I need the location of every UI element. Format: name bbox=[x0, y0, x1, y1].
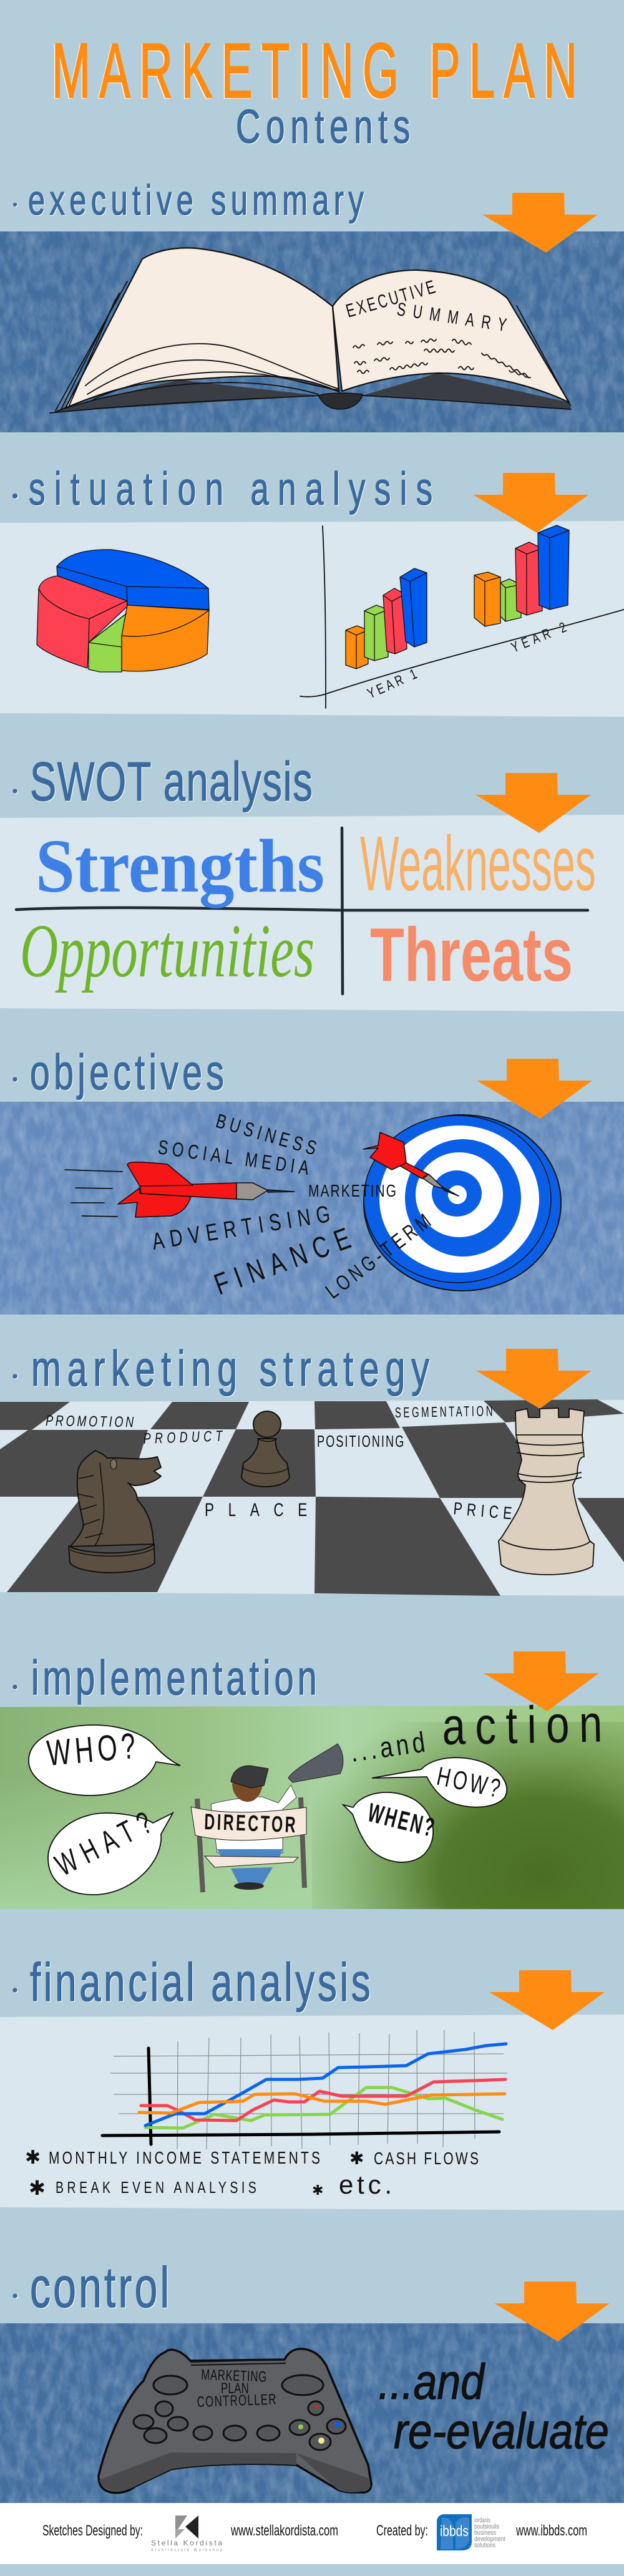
square label: place: PLACE bbox=[205, 1499, 307, 1520]
arrow bbox=[494, 2282, 610, 2341]
square label: segmentation: SEGMENTATION bbox=[395, 1403, 493, 1421]
list: financial items bbox=[25, 2147, 479, 2200]
objective word: social media: SOCIAL MEDIA bbox=[157, 1135, 311, 1179]
controller label: PLAN bbox=[221, 2380, 249, 2397]
speech bubble: who bbox=[29, 1725, 180, 1796]
illustration: director with megaphone bbox=[191, 1744, 343, 1892]
bar chart bbox=[300, 525, 624, 708]
list: financial items: etc. bbox=[339, 2170, 392, 2199]
book text: executive: EXECUTIVE bbox=[344, 277, 437, 322]
heading: executive summary: executive summary bbox=[28, 176, 364, 224]
footer background bbox=[0, 2503, 624, 2564]
illustration: flying dart bbox=[65, 1162, 295, 1217]
logo: ibbds: boutsioulis bbox=[474, 2523, 499, 2530]
book text: summary: SUMMARY bbox=[396, 299, 508, 336]
line chart bbox=[102, 2030, 507, 2149]
square label: positioning: POSITIONING bbox=[317, 1432, 404, 1451]
megaphone bbox=[288, 1744, 343, 1782]
list: financial items: ✱ bbox=[312, 2183, 323, 2199]
speech bubble: when: WHEN? bbox=[365, 1798, 437, 1842]
list: financial items: MONTHLY INCOME STATEMENTS bbox=[49, 2149, 320, 2168]
title bbox=[52, 27, 577, 153]
logo: stella kordista: Architecture Workshop bbox=[151, 2549, 223, 2552]
year 2 bars bbox=[474, 525, 569, 626]
heading: implementation: implementation bbox=[31, 1651, 317, 1705]
panel: executive summary band bbox=[0, 231, 624, 432]
list: financial items: ✱ bbox=[29, 2176, 46, 2200]
director body bbox=[211, 1785, 296, 1853]
controller label: MARKETING bbox=[201, 2366, 267, 2385]
heading: marketing plan: MARKETING PLAN bbox=[52, 27, 577, 114]
chess piece: pawn bbox=[241, 1411, 290, 1487]
panel: chessboard bbox=[0, 1399, 624, 1596]
opportunities: Opportunities bbox=[20, 909, 314, 993]
logo: ibbds: development bbox=[474, 2535, 505, 2543]
link: ibbds: www.ibbds.com bbox=[515, 2522, 587, 2539]
illustration: target bbox=[364, 1115, 561, 1291]
arrow bbox=[476, 1349, 592, 1409]
year 1 bars bbox=[346, 568, 427, 669]
controller label: CONTROLLER bbox=[197, 2391, 276, 2411]
speech bubble: how: HOW? bbox=[434, 1761, 503, 1803]
swot grid lines bbox=[16, 828, 588, 994]
chess piece: knight bbox=[69, 1451, 161, 1573]
logo: ibbds bbox=[437, 2514, 505, 2550]
panel: situation analysis band bbox=[0, 521, 624, 717]
arrow bbox=[484, 1651, 599, 1711]
logo: ibbds: ibbds bbox=[440, 2523, 469, 2540]
illustration: dart in target bbox=[363, 1132, 459, 1196]
list: financial items: BREAK EVEN ANALYSIS bbox=[56, 2178, 256, 2197]
text: and action: ...and bbox=[348, 1726, 427, 1768]
heading: objectives: objectives bbox=[30, 1044, 224, 1100]
arrow bbox=[482, 193, 598, 253]
book scribbled lines bbox=[353, 339, 530, 378]
arrow bbox=[475, 773, 591, 833]
list: financial items: CASH FLOWS bbox=[374, 2149, 479, 2169]
list: financial items: ✱ bbox=[25, 2147, 41, 2169]
chart axes bbox=[300, 526, 624, 708]
arrow bbox=[489, 1970, 605, 2030]
chess piece: rook bbox=[499, 1408, 594, 1575]
label: year 1: YEAR 1 bbox=[365, 666, 419, 702]
heading: control: control bbox=[30, 2255, 169, 2320]
objective word: long-term: LONG-TERM bbox=[321, 1210, 436, 1303]
panel: control band bbox=[0, 2323, 624, 2503]
section: control bbox=[0, 2255, 624, 2503]
illustration: director with megaphone: DIRECTOR bbox=[204, 1810, 296, 1837]
section: swot analysis bbox=[0, 752, 624, 1011]
section: situation analysis bbox=[0, 463, 624, 717]
section: financial analysis bbox=[0, 1952, 624, 2210]
panel: green band bbox=[0, 1706, 624, 1909]
objective word: finance: FINANCE bbox=[210, 1222, 355, 1301]
footer credits bbox=[0, 2503, 624, 2564]
square label: price: PRICE bbox=[452, 1499, 512, 1524]
section: executive summary bbox=[0, 176, 624, 432]
text: and action bbox=[348, 1694, 603, 1768]
objective word: business: BUSINESS bbox=[213, 1109, 319, 1159]
panel: financial band bbox=[0, 2015, 624, 2210]
controller label bbox=[197, 2366, 276, 2411]
arrow bbox=[473, 473, 588, 533]
heading: financial analysis: financial analysis bbox=[30, 1952, 371, 2012]
logo: stella kordista: Stella Kordista bbox=[151, 2539, 222, 2547]
logo: stella kordista bbox=[151, 2515, 223, 2552]
heading: contents: Contents bbox=[236, 100, 410, 153]
credit: sketches designed by: Sketches Designed by: bbox=[42, 2522, 143, 2539]
speech bubble: who: WHO? bbox=[45, 1726, 137, 1774]
pie chart bbox=[37, 550, 209, 672]
speech bubble: what: WHAT? bbox=[50, 1806, 157, 1883]
heading: marketing strategy: marketing strategy bbox=[31, 1341, 429, 1396]
square label: promotion: PROMOTION bbox=[46, 1413, 134, 1431]
link: stellakordista: www.stellakordista.com bbox=[230, 2522, 338, 2539]
chair frame bbox=[197, 1797, 305, 1892]
logo: ibbds: business bbox=[474, 2529, 496, 2537]
panel: objectives band bbox=[0, 1102, 624, 1315]
objective word: marketing: MARKETING bbox=[308, 1182, 396, 1201]
speech bubble: when bbox=[343, 1792, 437, 1862]
credit: created by: Created by: bbox=[376, 2522, 428, 2539]
text: and action: action bbox=[442, 1694, 603, 1756]
square label: product: PRODUCT bbox=[143, 1428, 224, 1447]
section: implementation bbox=[0, 1651, 624, 1909]
text: and re-evaluate: ...and bbox=[378, 2354, 485, 2409]
logo: ibbds: iordanis bbox=[474, 2517, 490, 2524]
logo: ibbds: solutions bbox=[474, 2542, 495, 2549]
objective word: advertising: ADVERTISING bbox=[150, 1202, 332, 1255]
illustration: game controller bbox=[99, 2349, 371, 2493]
controller sticks and buttons bbox=[134, 2375, 346, 2450]
section: marketing strategy bbox=[0, 1341, 624, 1596]
panel: swot band bbox=[0, 815, 624, 1011]
strengths: Strengths bbox=[36, 824, 324, 908]
list: financial items: ✱ bbox=[349, 2148, 364, 2169]
arrow bbox=[477, 1059, 592, 1119]
section: objectives bbox=[0, 1044, 624, 1315]
heading: situation analysis: situation analysis bbox=[29, 463, 432, 515]
speech bubble: how bbox=[372, 1757, 507, 1807]
text: and re-evaluate bbox=[378, 2354, 609, 2459]
label: year 2: YEAR 2 bbox=[509, 620, 568, 656]
illustration: open book bbox=[50, 248, 571, 413]
heading: swot analysis: SWOT analysis bbox=[30, 752, 313, 813]
